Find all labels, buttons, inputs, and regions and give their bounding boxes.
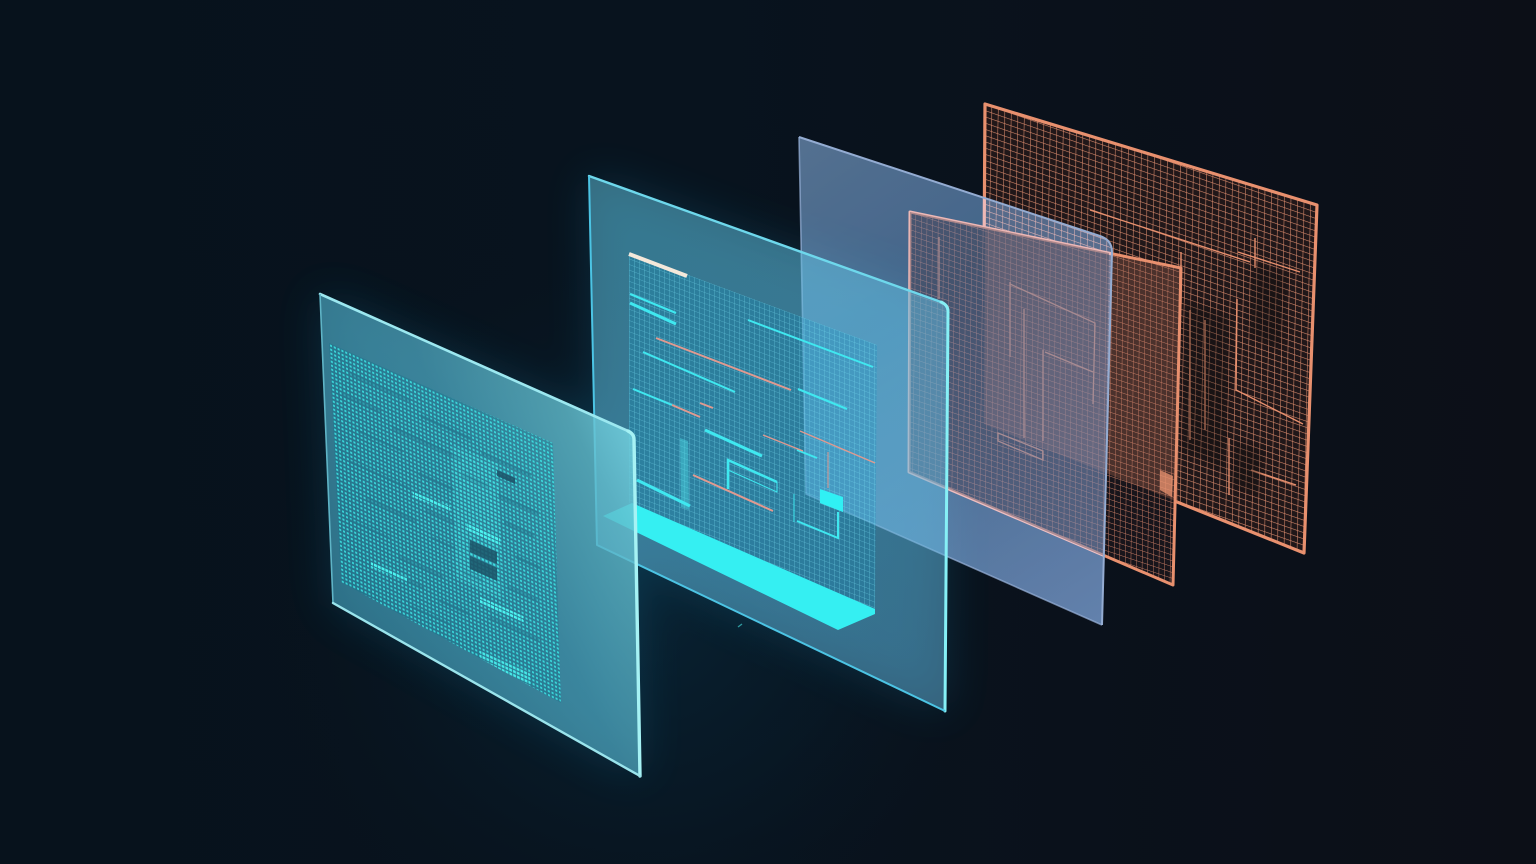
cyan square: [820, 489, 843, 512]
edge: top and right of glass: [799, 137, 1112, 625]
circuit traces: rear panel: [1090, 210, 1303, 495]
circuit traces: middle panel: [939, 237, 1095, 460]
edge: left and bottom of cyan panel: [589, 176, 945, 711]
header bar: [629, 254, 687, 276]
translucent column: [680, 438, 689, 510]
border: middle panel: [909, 212, 1181, 585]
dimming: glass over middle panel: [909, 212, 1109, 556]
overlap tint: where middle panel crosses rear panel: [984, 228, 1181, 502]
cyan content lines: [630, 294, 873, 538]
edge: top of front panel: [320, 294, 628, 431]
dark patches: rear panel: [1182, 265, 1285, 495]
corner square: middle panel: [1160, 470, 1173, 497]
border: rear panel: [983, 104, 1317, 553]
edge: bottom and left of glass: [799, 137, 1102, 625]
grid: cyan mesh: [629, 253, 877, 610]
spark: small mark on background: [738, 624, 742, 627]
panel: rear coral grid: [983, 104, 1317, 553]
bright dot clusters: [371, 445, 530, 690]
coral content lines: [656, 338, 875, 511]
glow: halo behind cyan panels: [320, 176, 948, 776]
text-line gaps in dot field: [341, 373, 540, 641]
panel: frosted blue-gray glass: [799, 137, 1112, 625]
dark gaps in dot field: [470, 470, 515, 581]
dot matrix field: [329, 343, 561, 703]
panel: front cyan dot matrix: [320, 294, 640, 776]
edge: top of cyan panel: [589, 176, 941, 302]
edge: right of front panel: [628, 431, 640, 776]
edge: bottom of front panel: [333, 603, 640, 776]
illustration: five translucent layered panels: [300, 102, 1319, 864]
edge: left of front panel: [320, 294, 333, 603]
glowing base slab: [603, 503, 875, 630]
edge: right of cyan panel: [941, 302, 948, 711]
panel: cyan layout grid: [589, 176, 948, 711]
panel: middle coral grid: [909, 212, 1181, 585]
